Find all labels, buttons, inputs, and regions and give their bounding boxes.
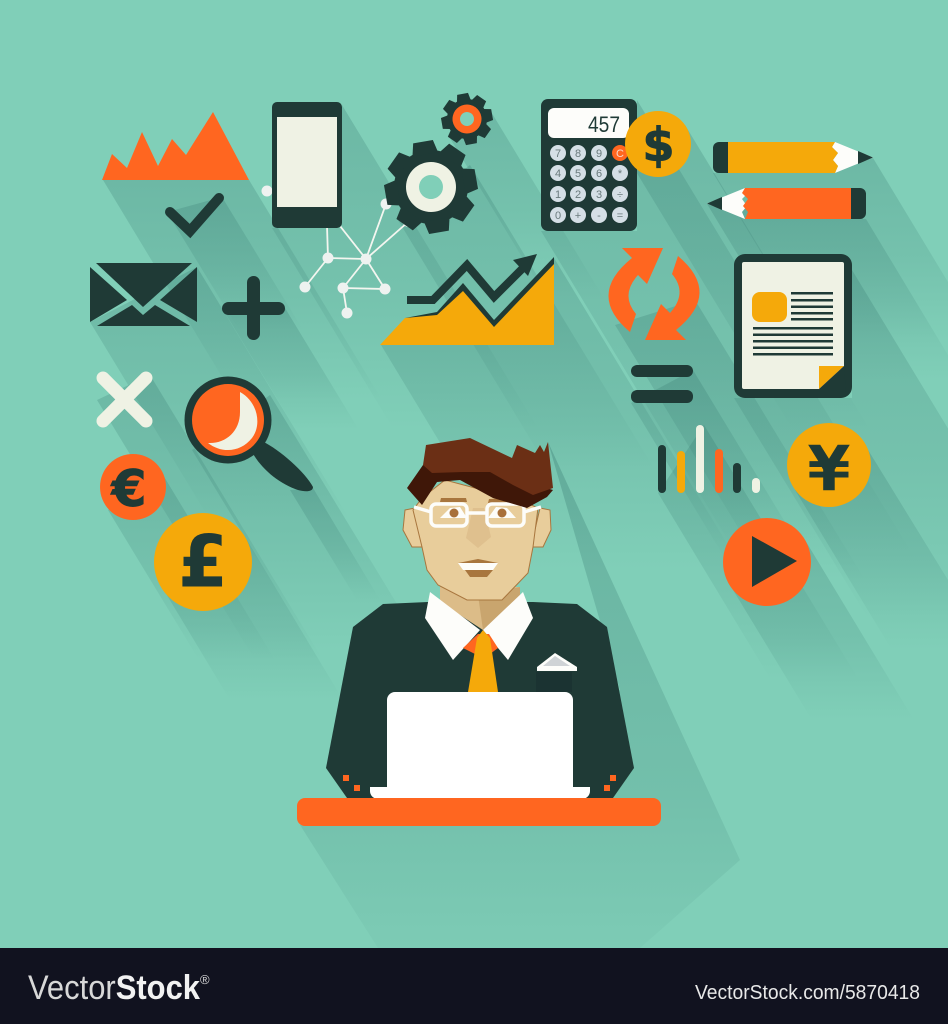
icon: dollar coin: $ [642, 118, 675, 172]
icon: refresh arrows [608, 248, 700, 340]
pocket square [536, 653, 577, 692]
icon: orange pencil [707, 188, 866, 219]
figure: man at laptop [297, 438, 661, 826]
laptop [370, 692, 590, 799]
icon: document tablet [734, 254, 852, 398]
icon: small bar chart [658, 425, 760, 493]
calculator keys [550, 145, 628, 223]
calculator keys: 0 [555, 210, 561, 222]
right collar [483, 592, 533, 660]
eyebrows [440, 498, 512, 503]
calculator keys: 5 [575, 168, 581, 180]
registered mark: ® [200, 972, 210, 987]
calculator keys: 1 [555, 189, 561, 201]
icon: check mark [170, 198, 219, 231]
icon: growth chart with arrow [380, 254, 554, 345]
hair [407, 438, 553, 508]
icon: plus [222, 276, 285, 340]
calculator keys: 3 [596, 189, 602, 201]
jacket [326, 602, 634, 798]
icon: euro coin [100, 454, 166, 520]
footer logo: VectorStock [28, 969, 200, 1007]
left collar [425, 592, 480, 660]
calculator keys: - [597, 210, 601, 222]
calculator keys: * [618, 168, 623, 180]
icon: play button [723, 518, 811, 606]
calculator keys: ÷ [617, 189, 623, 201]
icon: yen coin: ¥ [807, 432, 851, 505]
calculator keys: 2 [575, 189, 581, 201]
footer bar [0, 948, 948, 1024]
calculator keys: 9 [596, 148, 602, 160]
calculator keys: = [617, 210, 623, 222]
eyes [440, 507, 516, 518]
icon: envelope [90, 263, 197, 326]
icon: yellow pencil [713, 142, 873, 173]
calculator keys: 8 [575, 148, 581, 160]
icon: large gear [378, 134, 484, 240]
long shadows [90, 100, 948, 720]
cuff buttons [343, 775, 616, 791]
icon: multiply cross [103, 378, 146, 421]
man's long shadow [300, 442, 740, 948]
calculator display number: 457 [588, 112, 620, 137]
icon: orange mountain chart [102, 112, 249, 180]
calculator keys: + [575, 210, 581, 222]
icon: calculator [541, 99, 637, 231]
icon: network nodes [262, 186, 413, 318]
face [413, 480, 538, 600]
calculator keys: 4 [555, 168, 561, 180]
calculator keys: 6 [596, 168, 602, 180]
tie [463, 630, 498, 692]
icon: smartphone [272, 102, 342, 228]
nose [466, 508, 491, 548]
glasses [414, 504, 541, 526]
desk [297, 798, 661, 826]
icon: yen coin [787, 423, 871, 507]
icon: dollar coin [625, 111, 691, 177]
icon: equals sign [631, 365, 693, 403]
mouth [458, 559, 498, 577]
ears [403, 508, 551, 547]
icon: small gear [437, 89, 497, 149]
calculator keys: C [616, 148, 624, 160]
icon: euro coin: € [111, 460, 146, 518]
icon: magnifying glass [184, 376, 313, 491]
icon: pound coin: £ [179, 521, 227, 603]
calculator keys: 7 [555, 148, 561, 160]
footer image id: VectorStock.com/5870418 [695, 982, 920, 1004]
neck [440, 587, 520, 630]
icon: pound coin [154, 513, 252, 611]
